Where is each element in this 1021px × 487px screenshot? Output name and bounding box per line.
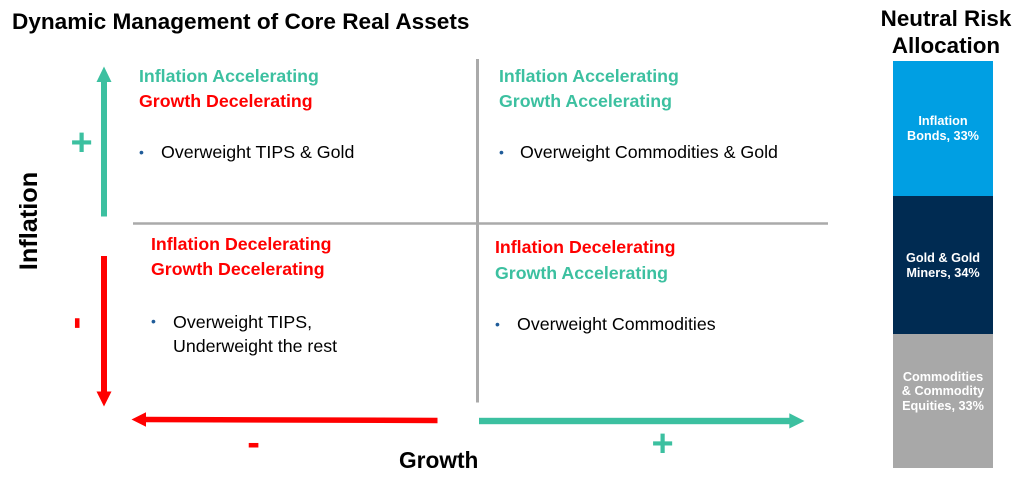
quadrant: bottom left: Underweight the rest (173, 336, 337, 356)
segment: inflation bonds: Bonds, 33% (907, 128, 979, 142)
segment: gold: Gold & Gold (906, 251, 980, 265)
segment: inflation bonds (893, 61, 993, 196)
arrow: growth right (479, 413, 804, 428)
sign: inflation minus: - (54, 316, 96, 329)
segment: commodities: Commodities (903, 370, 983, 384)
quadrant: bottom right: Inflation Decelerating (495, 237, 676, 257)
quadrant: bottom left: • (151, 313, 156, 329)
arrow: inflation down (96, 256, 112, 406)
quadrant: top right: Overweight Commodities & Gold (520, 142, 778, 162)
title: Dynamic Management of Core Real Assets (12, 8, 469, 34)
quadrant: bottom right: Growth Accelerating (495, 263, 668, 283)
quadrant: bottom left: Growth Decelerating (151, 259, 325, 279)
arrow: inflation up (96, 66, 112, 216)
segment: gold (893, 196, 993, 334)
segment: gold: Miners, 34% (906, 266, 980, 280)
segment: commodities (893, 334, 993, 468)
quadrant: top left: Inflation Accelerating (139, 66, 319, 86)
quadrant: top right: Inflation Accelerating (499, 66, 679, 86)
quadrant: bottom left: Inflation Decelerating (151, 234, 332, 254)
sign: inflation plus: + (70, 122, 93, 164)
quadrant: top right: • (499, 144, 504, 160)
arrow: growth left (132, 412, 438, 427)
axis label: growth: Growth (399, 446, 478, 472)
allocation heading: Allocation (892, 32, 1000, 58)
quadrant: bottom left: Overweight TIPS, (173, 312, 312, 332)
sign: growth plus: + (652, 423, 674, 465)
axis label: inflation: Inflation (14, 171, 42, 270)
quadrant: bottom right (495, 237, 716, 334)
quadrant: top right (499, 66, 778, 162)
quadrant: top right: Growth Accelerating (499, 91, 672, 111)
quadrant: top left (139, 66, 354, 162)
quadrant: bottom right: • (495, 316, 500, 332)
quadrant: top left: Growth Decelerating (139, 91, 313, 111)
segment: commodities: & Commodity (902, 384, 984, 398)
allocation heading: Neutral Risk (881, 6, 1011, 30)
segment: inflation bonds: Inflation (918, 114, 968, 128)
quadrant: bottom right: Overweight Commodities (517, 314, 716, 334)
quadrant: top left: • (139, 144, 144, 160)
quadrant: bottom left (151, 234, 337, 356)
quadrant: top left: Overweight TIPS & Gold (161, 142, 354, 162)
segment: commodities: Equities, 33% (902, 398, 984, 412)
allocation heading (881, 6, 1012, 58)
sign: growth minus: - (247, 422, 260, 464)
stacked allocation bar (893, 61, 993, 468)
